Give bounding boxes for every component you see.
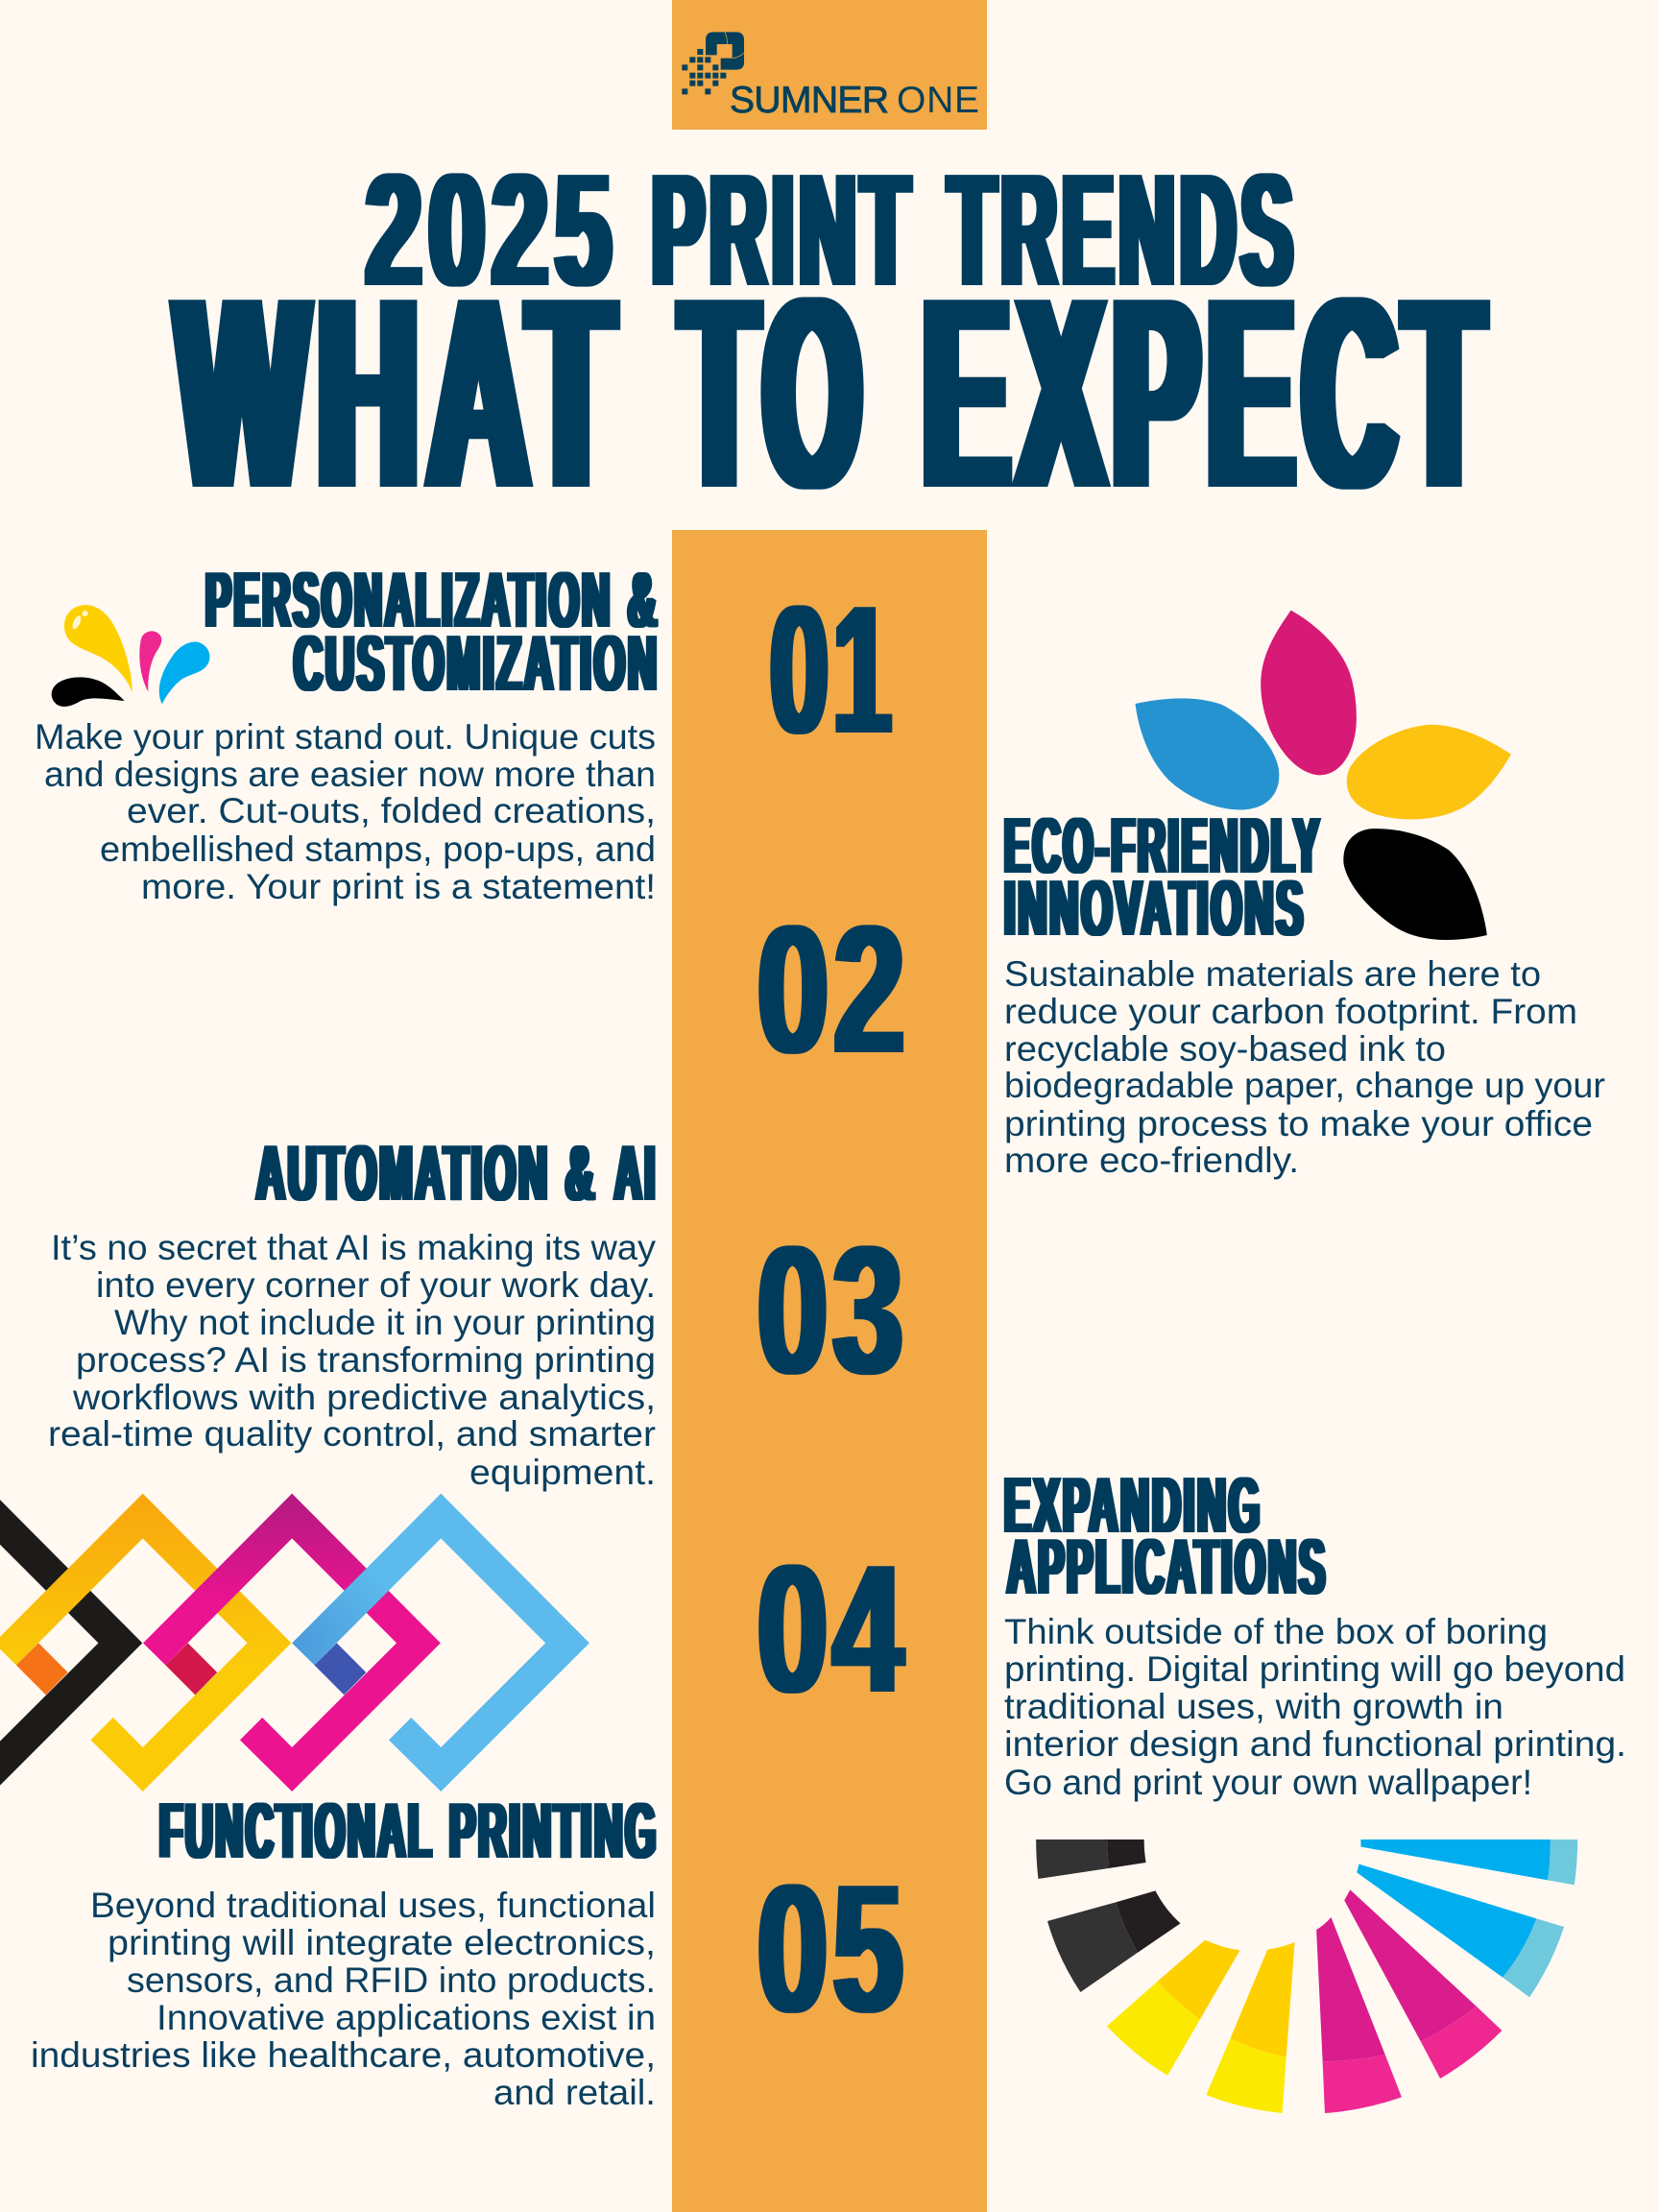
body text: Why not include it in your printing [114,1303,656,1342]
body text [48,1228,657,1492]
title [177,141,1493,544]
number 01: 01 [770,568,896,772]
panel: eco-friendly innovations: ECO-FRIENDLY [1004,801,1322,890]
logo mark [682,32,744,94]
infographic canvas: AI [614,1128,658,1217]
body text: interior design and functional printing. [1004,1724,1626,1764]
body text [35,717,656,906]
body text: and retail. [493,2073,656,2112]
body text: printing will integrate electronics, [108,1923,656,1962]
body text: Think outside of the box of boring [1004,1612,1548,1651]
body text: real-time quality control, and smarter [48,1414,656,1454]
heading [256,1128,658,1217]
body text [1004,1612,1626,1802]
logo wordmark: ONE [897,80,979,121]
body text: and designs are easier now more than [44,755,656,794]
body text: into every corner of your work day. [96,1265,656,1305]
panel: functional printing [31,1786,659,2112]
body text: industries like healthcare, automotive, [31,2035,656,2075]
heading: CUSTOMIZATION [294,618,660,708]
heading [1004,1460,1328,1611]
body text: reduce your carbon footprint. From [1004,992,1577,1031]
number 04: 04 [757,1527,908,1731]
body text: biodegradable paper, change up your [1004,1066,1605,1105]
body text: more eco-friendly. [1004,1141,1299,1180]
body text: embellished stamps, pop-ups, and [100,830,656,869]
icon: ink splash [52,605,210,707]
body text: ever. Cut-outs, folded creations, [127,791,656,830]
body text: printing process to make your office [1004,1104,1593,1143]
body text: recyclable soy-based ink to [1004,1029,1446,1069]
panel: personalization and customization [35,555,660,906]
number 05: 05 [757,1847,908,2051]
panel: eco-friendly innovations [1004,801,1605,1180]
title: 2025 [366,141,618,320]
body text: equipment. [469,1453,656,1492]
panel: expanding applications: APPLICATIONS [1007,1522,1328,1611]
infographic canvas: PRINTING [449,1786,659,1875]
title: TRENDS [949,141,1298,320]
body text: Go and print your own wallpaper! [1004,1763,1532,1802]
title: TO [682,241,870,544]
heading: INNOVATIONS [1004,863,1306,952]
logo wordmark: SUMNER [730,80,889,121]
panel: expanding applications [1004,1460,1626,1802]
body text: Innovative applications exist in [156,1998,656,2037]
heading: FUNCTIONAL [159,1786,434,1875]
body text [1004,954,1605,1180]
heading: EXPANDING [1004,1460,1262,1550]
body text [31,1886,656,2112]
title: PRINT [652,141,915,320]
heading: & [628,555,660,644]
panel: automation and AI [48,1128,658,1492]
number 03: 03 [757,1209,908,1412]
body text: traditional uses, with growth in [1004,1687,1503,1726]
center orange band with numbers [672,530,987,2212]
heading [205,555,660,708]
body text: workflows with predictive analytics, [72,1378,656,1417]
body text: more. Your print is a statement! [141,867,656,906]
body text: Beyond traditional uses, functional [90,1886,656,1925]
logo wordmark [730,80,979,121]
body text: Make your print stand out. Unique cuts [35,717,656,757]
body text: It’s no secret that AI is making its way [51,1228,657,1267]
icon: interlocking CMYK diamonds [0,1494,589,1791]
heading: PERSONALIZATION [205,555,613,644]
heading [1004,801,1322,952]
heading: AUTOMATION [256,1128,550,1217]
icon: CMYK flower petals [1135,611,1511,940]
body text: process? AI is transforming printing [76,1340,656,1380]
icon: CMYK color fan [1036,1839,1577,2113]
body text: sensors, and RFID into products. [127,1960,656,2000]
body text: printing. Digital printing will go beyond [1004,1649,1625,1689]
heading: & [565,1128,597,1217]
number 02: 02 [757,888,910,1092]
body text: Sustainable materials are here to [1004,954,1541,994]
title: WHAT [177,241,624,544]
logo panel [672,0,987,130]
